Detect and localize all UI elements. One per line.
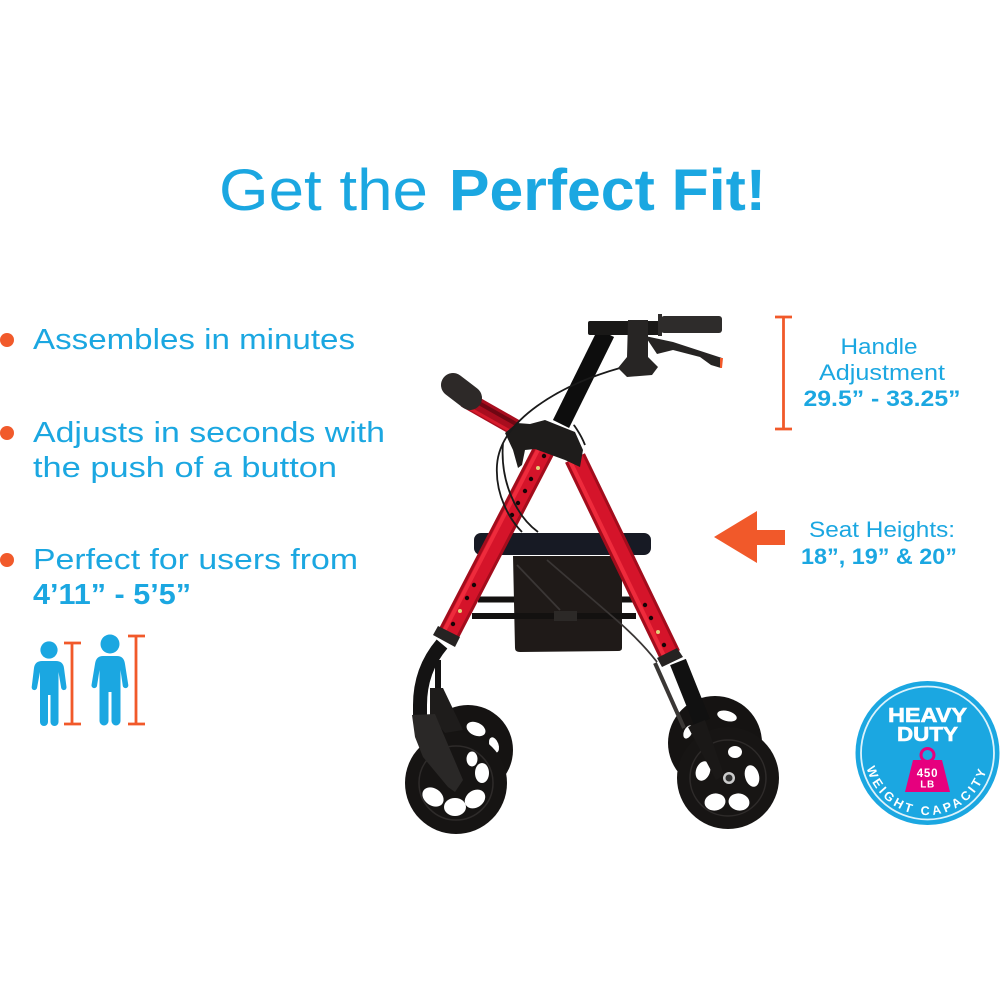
cross bars xyxy=(472,600,640,616)
brake lever xyxy=(645,336,722,368)
feature: adjusts in seconds xyxy=(33,417,385,484)
folding bracket xyxy=(505,420,583,468)
front wheel xyxy=(677,727,779,829)
icon: shorter person with height bracket xyxy=(32,641,81,726)
rear caster housing xyxy=(430,688,463,733)
heavy duty badge xyxy=(856,681,1000,825)
icon: pink weight: LB xyxy=(920,780,935,790)
bag straps xyxy=(517,560,657,662)
handle adjustment bracket xyxy=(775,317,792,429)
rear upper red tube xyxy=(462,398,516,431)
handle adjustment label: Adjustment xyxy=(819,360,946,385)
icon: taller person with height bracket xyxy=(91,634,145,726)
bullet: adjusts xyxy=(0,426,14,440)
feature: adjusts in seconds: Adjusts in seconds with xyxy=(33,417,385,449)
brake clamp xyxy=(618,320,658,377)
left red tube xyxy=(442,448,544,637)
bullet: users xyxy=(0,553,14,567)
badge heading: HEAVY xyxy=(888,704,967,727)
handle adjustment label xyxy=(804,334,960,411)
adjustment holes xyxy=(451,454,666,647)
bullet: assembles xyxy=(0,333,14,347)
handlebar xyxy=(588,321,661,335)
title: Get the xyxy=(219,158,428,223)
icon: pink weight xyxy=(905,748,950,792)
title: Perfect Fit! xyxy=(449,158,766,223)
front fork xyxy=(688,720,724,780)
brake lever tip xyxy=(720,358,723,368)
collars xyxy=(433,626,683,667)
cables xyxy=(497,368,620,532)
handle adjustment label: 29.5” - 33.25” xyxy=(804,386,960,411)
badge heading: DUTY xyxy=(897,723,958,746)
badge curved caption: WEIGHT CAPACITY xyxy=(867,765,986,816)
icon: pink weight: 450 xyxy=(917,768,938,780)
black handle post xyxy=(561,333,606,424)
seat heights label: Seat Heights: xyxy=(809,517,955,542)
rear wheel xyxy=(405,732,507,834)
feature: perfect for users: Perfect for users from xyxy=(33,544,358,576)
right red tube xyxy=(570,458,670,658)
rear fork xyxy=(420,644,442,716)
front wheel behind xyxy=(668,696,762,790)
feature: assembles in minutes: Assembles in minutes xyxy=(33,324,355,356)
seat bag xyxy=(513,556,622,652)
rear grip xyxy=(453,385,470,398)
feature: perfect for users xyxy=(33,544,358,611)
seat heights label xyxy=(801,517,957,569)
feature list xyxy=(0,324,385,611)
seat heights label: 18”, 19” & 20” xyxy=(801,544,957,569)
hand grip xyxy=(658,314,722,336)
feature: perfect for users: 4’11” - 5’5” xyxy=(33,579,191,611)
badge heading xyxy=(888,704,967,746)
handle adjustment label: Handle xyxy=(840,334,918,359)
rear wheel behind xyxy=(423,705,513,795)
title xyxy=(219,158,766,223)
strap buckle xyxy=(554,611,577,621)
rollator walker photo xyxy=(405,314,779,834)
cable and spring xyxy=(655,663,684,728)
feature: adjusts in seconds: the push of a button xyxy=(33,452,337,484)
seat cushion xyxy=(474,533,651,555)
front lower tube xyxy=(678,662,702,722)
arrow pointing to seat xyxy=(714,511,785,563)
